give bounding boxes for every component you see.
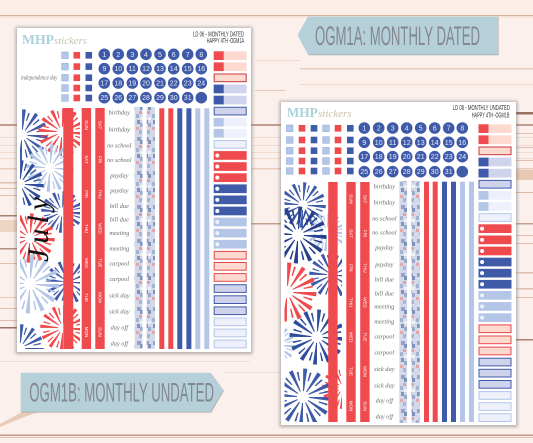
script event labels: bill due	[375, 291, 394, 298]
weekday strips: WED	[84, 258, 89, 269]
fireworks strip with July script: July	[22, 196, 55, 262]
logo	[287, 106, 352, 121]
weekday strips: SAT	[362, 195, 367, 203]
sheet title: HAPPY 4TH -OGM1A	[207, 38, 244, 45]
date circles: 25	[100, 95, 108, 102]
script event labels: sick day	[109, 309, 130, 316]
weekday strips: WED	[97, 223, 102, 235]
script event labels: no school	[107, 143, 132, 150]
weekday strips: TUE	[348, 367, 353, 376]
date circles: 12	[403, 140, 411, 147]
date circles: 28	[403, 169, 411, 176]
date circles: 19	[389, 154, 397, 161]
small square stickers	[62, 52, 92, 101]
date circles: 27	[389, 169, 397, 176]
weekday strips	[82, 108, 105, 349]
date circles: 29	[417, 169, 425, 176]
date circles: 12	[142, 66, 150, 73]
script event labels: meeting	[374, 319, 394, 326]
weekday strips: TUE	[362, 332, 367, 342]
date circles	[358, 122, 468, 178]
washi strips	[399, 181, 420, 423]
date circles: 27	[128, 95, 136, 102]
date circles: 5	[158, 52, 162, 59]
date circles: 31	[184, 95, 192, 102]
script event labels: carpool	[375, 334, 394, 341]
weekday strips: THU	[84, 224, 89, 233]
weekday strips: THU	[97, 189, 102, 199]
column of label stickers	[478, 124, 512, 422]
date circles: 7	[447, 126, 451, 132]
script event labels: no school	[107, 157, 132, 164]
date circles: 23	[184, 80, 192, 88]
date circles: 6	[433, 126, 437, 132]
script event labels	[372, 183, 397, 421]
weekday strips: SUN	[348, 194, 353, 204]
weekday strips: THU	[348, 298, 353, 307]
sheet title	[193, 32, 244, 45]
script event labels: payday	[109, 172, 129, 179]
date circles: 24	[458, 154, 466, 161]
date circles: 21	[417, 154, 425, 161]
date circles: 9	[362, 140, 366, 147]
date circles: 20	[403, 154, 411, 161]
fireworks strip	[284, 182, 342, 422]
date circles: 29	[156, 95, 164, 102]
script event labels: payday	[109, 188, 129, 195]
script event labels: birthday	[374, 183, 395, 190]
date circles: 26	[375, 169, 383, 176]
date circles: 16	[458, 140, 466, 147]
weekday strips: MON	[348, 401, 353, 411]
weekday strips: MON	[84, 327, 89, 337]
weekday strips: WED	[348, 332, 353, 343]
weekday strips	[346, 182, 370, 422]
weekday strips: MON	[97, 292, 102, 303]
weekday strips: TUE	[97, 258, 102, 268]
script event labels: birthday	[109, 126, 130, 133]
label: independence day: independence day	[21, 74, 58, 82]
date circles: 1	[362, 126, 366, 132]
script event labels: meeting	[109, 230, 129, 237]
script event labels: meeting	[109, 245, 129, 252]
script event labels: no school	[372, 230, 397, 237]
banner: OGM1B monthly undated: OGM1B: MONTHLY UNDATED	[29, 378, 214, 408]
logo	[22, 33, 87, 48]
date circles: 21	[156, 80, 164, 88]
date circles: 31	[445, 169, 453, 176]
weekday strips: FRI	[362, 230, 367, 237]
date circles: 15	[445, 140, 453, 147]
banner: OGM1B monthly undated	[21, 373, 224, 412]
weekday strips: SAT	[84, 155, 89, 164]
date circles: 30	[170, 95, 178, 102]
weekday strips: THU	[362, 263, 367, 273]
weekday strips: SUN	[84, 120, 89, 130]
script event labels: payday	[374, 261, 394, 268]
script event labels: day off	[376, 398, 394, 405]
weekday strips: TUE	[84, 293, 89, 302]
date circles: 8	[199, 52, 203, 59]
date circles: 14	[170, 66, 178, 73]
script event labels: bill due	[110, 216, 129, 223]
date circles: 5	[419, 126, 423, 132]
small square stickers	[286, 125, 354, 174]
script event labels: sick day	[374, 382, 395, 389]
logo: MHP	[22, 33, 54, 48]
date circles: 19	[128, 80, 136, 88]
date circles: 10	[114, 66, 122, 73]
fireworks strip with July script	[20, 108, 80, 349]
logo: stickers	[318, 108, 352, 120]
date circles: 14	[431, 140, 439, 147]
vertical colour stripes	[424, 182, 474, 422]
script event labels: sick day	[374, 366, 395, 373]
script event labels: day off	[111, 340, 129, 347]
date circles: 3	[391, 126, 395, 132]
date circles: 8	[460, 126, 464, 132]
sheet title	[453, 105, 510, 120]
date circles: 23	[445, 154, 453, 161]
weekday strips: MON	[362, 366, 367, 377]
date circles: 24	[197, 80, 205, 88]
banner: OGM1A monthly dated	[298, 16, 498, 55]
date circles: 28	[142, 95, 150, 102]
date circles: 2	[377, 126, 381, 132]
date circles: 11	[129, 66, 136, 73]
date circles: 22	[431, 154, 439, 161]
date circles: 26	[114, 95, 122, 102]
date circles: 6	[172, 52, 176, 59]
panel: dated sticker sheet	[2, 27, 252, 366]
date circles: 18	[375, 154, 383, 161]
date circles: 7	[186, 52, 190, 59]
vertical colour stripes	[159, 108, 209, 349]
date circles: 13	[156, 66, 164, 73]
weekday strips: FRI	[348, 264, 353, 272]
weekday strips: WED	[362, 297, 367, 309]
date circles: 30	[431, 169, 439, 176]
weekday strips: SAT	[348, 229, 353, 238]
date circles: 4	[405, 126, 409, 132]
weekday strips: SAT	[97, 121, 102, 129]
date circles	[98, 48, 207, 103]
script event labels: no school	[372, 215, 397, 222]
date circles: 1	[102, 52, 106, 59]
weekday strips: FRI	[97, 156, 102, 163]
date circles: 16	[197, 66, 205, 73]
script event labels: day off	[111, 324, 129, 331]
date circles: 9	[102, 66, 106, 73]
sheet title: LD 06 - MONTHLY DATED	[193, 32, 244, 38]
date circles: 17	[360, 154, 368, 161]
date circles: 15	[184, 66, 192, 73]
date circles: 18	[114, 80, 122, 88]
script event labels: sick day	[109, 293, 130, 300]
date circles: 2	[116, 52, 120, 59]
date circles: 22	[170, 80, 178, 88]
date circles: 10	[375, 140, 383, 147]
date circles: 13	[417, 140, 425, 147]
script event labels: meeting	[374, 304, 394, 311]
script event labels: carpool	[375, 349, 394, 356]
weekday strips: SUN	[97, 327, 102, 337]
column of label stickers	[214, 51, 247, 348]
script event labels: birthday	[109, 110, 130, 117]
date circles: 17	[100, 80, 108, 88]
washi strips	[135, 107, 155, 349]
date circles: 4	[144, 52, 148, 59]
date circles: 25	[360, 169, 368, 176]
script event labels: carpool	[110, 261, 129, 268]
panel: undated sticker sheet	[260, 101, 518, 427]
script event labels: day off	[376, 414, 394, 421]
script event labels: carpool	[110, 276, 129, 283]
logo: MHP	[287, 106, 318, 121]
weekday strips: SUN	[362, 401, 367, 411]
date circles: 3	[130, 52, 134, 59]
logo: stickers	[54, 35, 87, 47]
script event labels: bill due	[375, 276, 394, 283]
date circles: 20	[142, 80, 150, 88]
script event labels: payday	[374, 245, 394, 252]
script event labels: bill due	[110, 203, 129, 210]
script event labels: birthday	[374, 199, 395, 206]
date circles: 11	[389, 140, 396, 147]
script event labels	[107, 110, 132, 347]
weekday strips: FRI	[84, 190, 89, 198]
